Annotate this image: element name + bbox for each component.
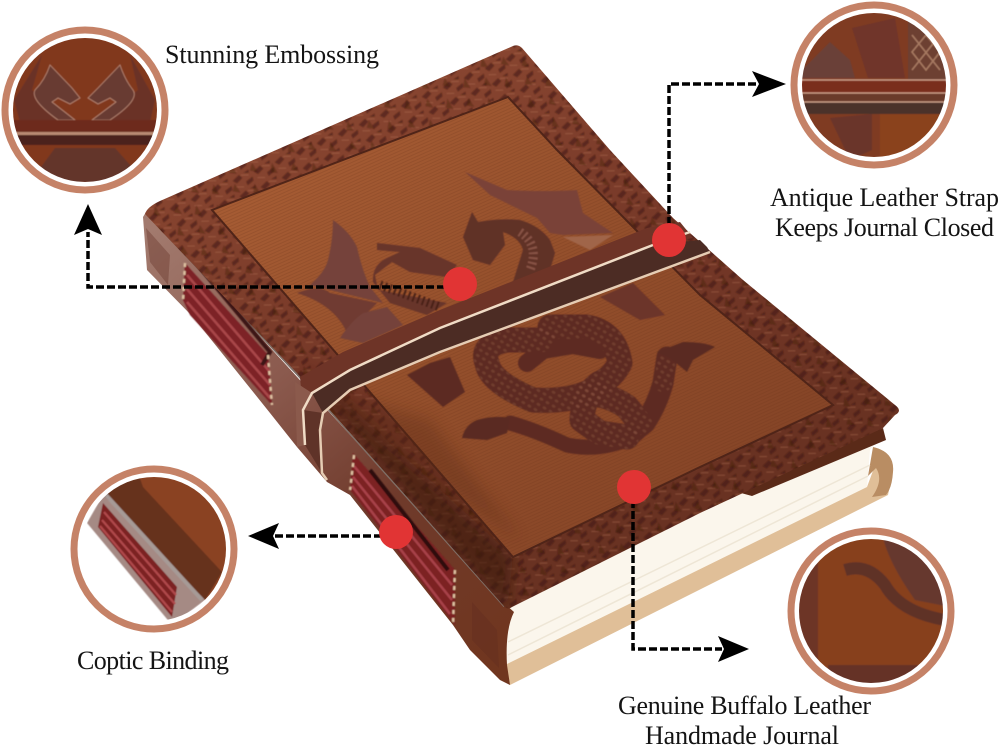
marker dot: leather: [617, 470, 651, 504]
embossed dragons: [297, 172, 715, 447]
label: genuine buffalo leather: Genuine Buffalo Leather: [618, 691, 871, 720]
left dragon: [297, 220, 457, 343]
wing below strap right: [600, 283, 665, 320]
arrow: to leather callout: [633, 500, 749, 662]
serpent knot: [486, 327, 667, 447]
callout circle: stunning embossing: [5, 30, 165, 190]
label: coptic binding: Coptic Binding: [77, 646, 229, 675]
arrow: to embossing callout: [74, 204, 445, 287]
wing below strap left: [407, 357, 465, 407]
right dragon: [463, 172, 613, 282]
arrow: to binding callout: [248, 523, 382, 549]
strap on spine inner: [303, 410, 323, 473]
inner panel: [212, 97, 833, 557]
strap wrapped over cover: [295, 222, 710, 480]
label: antique leather strap: [770, 183, 999, 242]
leather cover: [130, 40, 910, 620]
label: genuine buffalo leather: [618, 691, 871, 749]
page block: [500, 428, 893, 685]
arrow: to strap callout: [669, 71, 786, 225]
strap on spine outer: [295, 382, 312, 447]
marker dot: strap: [652, 223, 686, 257]
label: stunning embossing: Stunning Embossing: [165, 40, 379, 69]
callout circle: coptic binding: [74, 469, 235, 629]
label: antique leather strap: Keeps Journal Closed: [775, 213, 994, 242]
coptic stitching upper: [183, 262, 272, 405]
strap lower band: [312, 240, 710, 413]
journal book photo: [130, 40, 910, 685]
strap upper band: [300, 222, 693, 410]
callout circle: antique strap: [794, 5, 954, 165]
label: antique leather strap: Antique Leather Strap: [770, 183, 999, 212]
spine: [143, 212, 514, 685]
marker dot: embossing: [443, 267, 477, 301]
coptic stitching lower: [350, 453, 455, 625]
serpent tail fins: [462, 342, 715, 440]
callout circle: buffalo leather: [791, 531, 951, 691]
marker dot: binding: [379, 515, 413, 549]
